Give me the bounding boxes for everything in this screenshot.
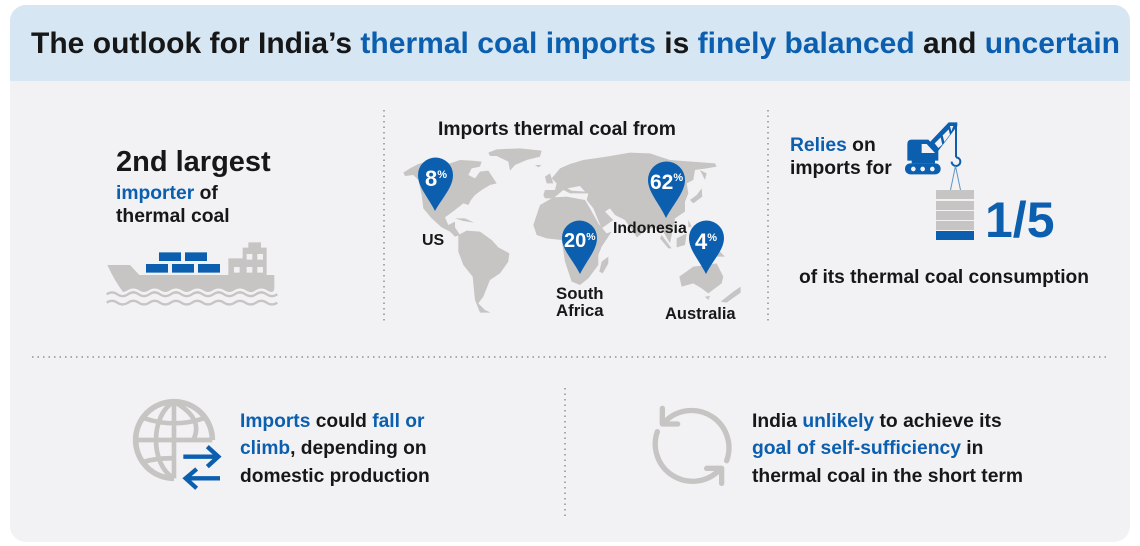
panel: self-sufficiency goal xyxy=(655,408,1023,487)
label: Indonesia: Indonesia xyxy=(613,220,687,237)
pin: South Africa 20% xyxy=(562,220,597,274)
text: importer of thermal coal: importer of xyxy=(116,183,218,204)
panel: imports could fall or climb xyxy=(136,402,430,488)
icon: crane with stack xyxy=(905,122,974,240)
text: unlikely to achieve self-sufficiency: India unlikely to achieve its xyxy=(752,411,1002,432)
text: relies on imports for: imports for xyxy=(790,158,892,179)
heading: 2nd largest: 2nd largest xyxy=(116,146,271,178)
text: imports could fall or climb: domestic production xyxy=(240,466,430,487)
pin: Indonesia 62%: 62 xyxy=(650,171,673,194)
pin: Indonesia 62%: % xyxy=(673,172,683,184)
pin: South Africa 20%: 20 xyxy=(564,230,586,252)
label: South Africa: South xyxy=(556,284,604,303)
text: unlikely to achieve self-sufficiency: goal of self-sufficiency in xyxy=(752,438,983,459)
pin: Australia 4% xyxy=(689,220,724,274)
pin: US 8%: % xyxy=(437,169,447,181)
label: South Africa: Africa xyxy=(556,301,604,320)
label: US: US xyxy=(422,232,445,249)
icon: container ship xyxy=(107,242,277,304)
heading: imports thermal coal from: Imports thermal coal from xyxy=(438,119,676,140)
pin: US 8% xyxy=(418,158,453,211)
text: of its thermal coal consumption: of its thermal coal consumption xyxy=(799,267,1089,288)
title: The outlook for India’s thermal coal imports is finely balanced and uncertain xyxy=(31,27,1120,60)
panel: import sources map xyxy=(403,119,741,323)
text: imports could fall or climb: Imports could fall or xyxy=(240,411,424,432)
title banner xyxy=(10,5,1130,81)
pin: US 8%: 8 xyxy=(425,166,437,191)
pin: Australia 4%: % xyxy=(707,232,717,244)
text: imports could fall or climb: climb, depending on xyxy=(240,438,427,459)
pin: Indonesia 62% xyxy=(648,162,685,218)
pin: South Africa 20%: % xyxy=(586,231,596,243)
icon: circular arrows xyxy=(655,408,729,483)
icon: globe with arrows xyxy=(136,402,220,488)
text: unlikely to achieve self-sufficiency: thermal coal in the short term xyxy=(752,466,1023,487)
text: importer of thermal coal: thermal coal xyxy=(116,206,230,227)
panel: second largest importer xyxy=(107,146,277,304)
panel: reliance on imports xyxy=(790,122,1089,288)
label: Australia: Australia xyxy=(665,305,736,323)
stat: 1/5: 1/5 xyxy=(985,192,1055,248)
world map xyxy=(403,148,741,313)
text: relies on imports for: Relies on xyxy=(790,135,876,156)
pin: Australia 4%: 4 xyxy=(695,229,707,254)
